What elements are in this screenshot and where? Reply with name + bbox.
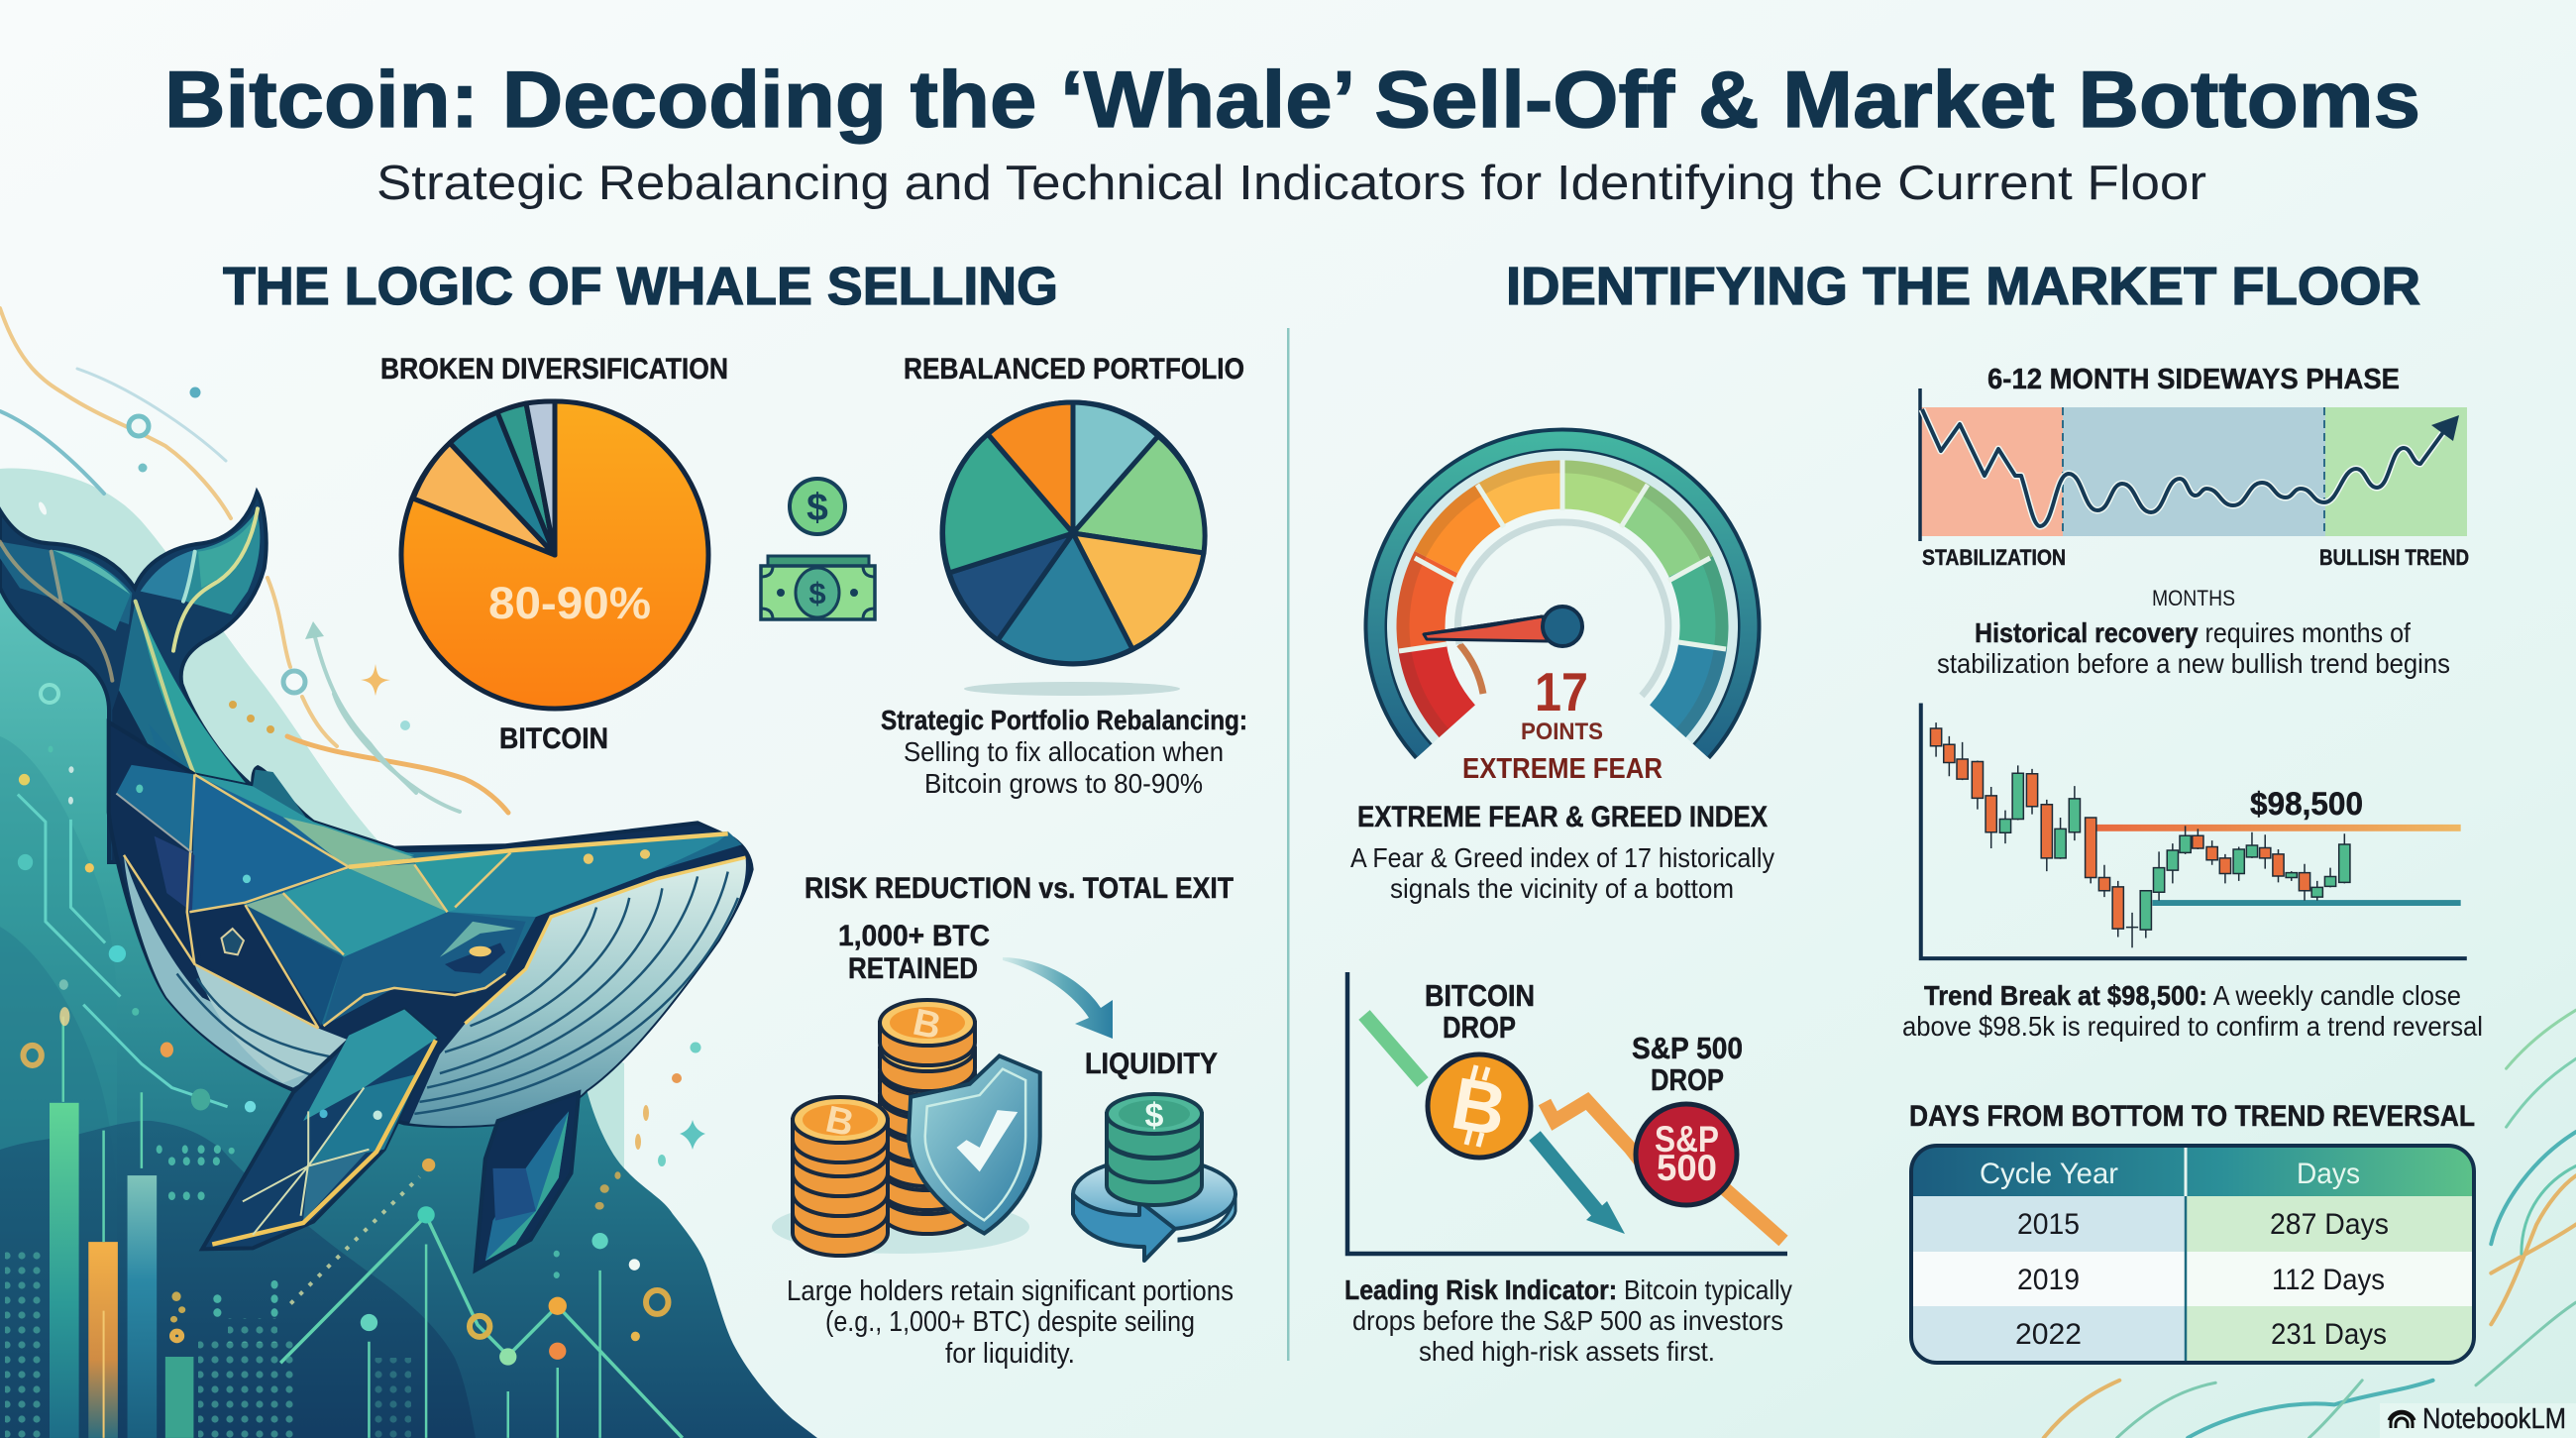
icon: liquidity stack with circular arrow bbox=[1073, 1094, 1235, 1261]
panel: leading risk indicator chart bbox=[1344, 972, 1792, 1367]
whale body bbox=[109, 722, 752, 1271]
icon: dollar coin bbox=[790, 479, 845, 534]
icon: banknote: $ bbox=[808, 576, 826, 610]
text: fear and greed: signals the vicinity of a bottom bbox=[1390, 873, 1734, 904]
text: strategic portfolio rebalancing bbox=[881, 705, 1247, 799]
row: 2022: 2022 bbox=[2015, 1318, 2082, 1351]
text: historical recovery bbox=[1937, 617, 2450, 679]
panel: sideways phase chart bbox=[1920, 364, 2469, 679]
icon: liquidity stack with circular arrow: $ bbox=[1145, 1097, 1164, 1135]
label: 1,000+ BTC retained: RETAINED bbox=[848, 952, 978, 985]
label: 1,000+ BTC retained: 1,000+ BTC bbox=[838, 920, 990, 952]
row: 2015: 2015 bbox=[2017, 1208, 2080, 1241]
logo: NotebookLM bbox=[2380, 1403, 2576, 1438]
heading: risk reduction: RISK REDUCTION vs. TOTAL EXIT bbox=[805, 872, 1234, 905]
label: rebalanced portfolio: REBALANCED PORTFOLIO bbox=[904, 353, 1244, 386]
decorative curves: top left bbox=[0, 308, 705, 1166]
labels: bitcoin drop: DROP bbox=[1443, 1010, 1516, 1045]
pie chart: 80-90% bitcoin bbox=[401, 401, 708, 709]
text: leading risk indicator bbox=[1344, 1274, 1792, 1367]
value: 17 points: POINTS bbox=[1521, 719, 1603, 745]
icon: dollar coin: $ bbox=[806, 487, 828, 529]
icon: bitcoin bbox=[1428, 1054, 1531, 1158]
label: $98,500: $98,500 bbox=[2250, 786, 2363, 822]
text: large holders: for liquidity. bbox=[945, 1338, 1075, 1370]
heading: left column: THE LOGIC OF WHALE SELLING bbox=[223, 257, 1058, 316]
text: leading risk indicator: Leading Risk Indicator: Bitcoin typically bbox=[1344, 1274, 1792, 1305]
gauge needle bbox=[1424, 607, 1582, 646]
panel: rebalanced portfolio pie bbox=[881, 353, 1247, 799]
heading: right column: IDENTIFYING THE MARKET FLOOR bbox=[1506, 257, 2420, 316]
table header bbox=[1980, 1158, 2360, 1190]
label: liquidity: LIQUIDITY bbox=[1085, 1048, 1218, 1080]
value: 17 points: 17 bbox=[1535, 661, 1588, 722]
text: fear and greed: A Fear & Greed index of 17 historically bbox=[1350, 842, 1774, 873]
icon: short bitcoin coin stack: B bbox=[822, 1099, 857, 1145]
labels: S&P 500 drop: S&P 500 bbox=[1632, 1031, 1743, 1065]
centre divider bbox=[1287, 328, 1290, 1361]
arrow: retained to liquidity bbox=[1003, 957, 1113, 1039]
line: green drop bbox=[1364, 1015, 1423, 1082]
table header: Days bbox=[2297, 1158, 2360, 1190]
price line bbox=[1922, 409, 2459, 526]
text: trend break bbox=[1902, 980, 2483, 1042]
chart axes bbox=[1347, 972, 1787, 1254]
heading: sideways phase: 6-12 MONTH SIDEWAYS PHASE bbox=[1987, 364, 2400, 395]
text: fear and greed bbox=[1350, 842, 1774, 904]
row: 2019 bbox=[2017, 1264, 2385, 1296]
heading: extreme fear and greed index: EXTREME FEAR & GREED INDEX bbox=[1357, 801, 1768, 833]
row: 2019: 112 Days bbox=[2272, 1264, 2385, 1296]
labels: bitcoin drop bbox=[1425, 978, 1535, 1045]
text: trend break: above $98.5k is required to confirm a trend reversal bbox=[1902, 1011, 2483, 1042]
whale eye bbox=[440, 922, 515, 974]
text: large holders bbox=[787, 1275, 1234, 1370]
label: 1,000+ BTC retained bbox=[838, 920, 990, 985]
pie chart: evenly split portfolio bbox=[942, 402, 1205, 664]
panel: candlestick chart bbox=[1902, 703, 2483, 1042]
value: 80-90%: 80-90% bbox=[488, 578, 651, 628]
labels: S&P 500 drop: DROP bbox=[1651, 1062, 1724, 1097]
row: 2019: 2019 bbox=[2017, 1264, 2080, 1296]
whale lower fin bbox=[476, 1092, 579, 1271]
labels: S&P 500 drop bbox=[1632, 1031, 1743, 1097]
value: 17 points bbox=[1521, 661, 1603, 745]
label: stabilization: STABILIZATION bbox=[1922, 545, 2066, 570]
icon: notebook arcs bbox=[2389, 1411, 2415, 1428]
label: months: MONTHS bbox=[2152, 586, 2235, 610]
line: orange S&P path bbox=[1545, 1101, 1783, 1241]
pie shadow bbox=[964, 682, 1180, 696]
text: historical recovery: Historical recovery requires months of bbox=[1975, 617, 2411, 648]
gauge dial bbox=[1376, 440, 1749, 751]
decorative wave illustration: left bbox=[0, 469, 817, 1438]
decorative curves: bottom right bbox=[2044, 1010, 2576, 1438]
text: large holders: Large holders retain significant portions bbox=[787, 1275, 1234, 1307]
panel: days from bottom table bbox=[1909, 1100, 2475, 1363]
panel: fear and greed gauge bbox=[1350, 440, 1774, 904]
icon: tall bitcoin coin stack: B bbox=[910, 1002, 944, 1048]
text: trend break: Trend Break at $98,500: A weekly candle close bbox=[1924, 980, 2461, 1011]
label: broken diversification: BROKEN DIVERSIFICATION bbox=[380, 353, 728, 386]
icon: S&P 500 bbox=[1636, 1104, 1737, 1205]
icon: S&P 500: S&P bbox=[1655, 1119, 1719, 1160]
labels: bitcoin drop: BITCOIN bbox=[1425, 978, 1535, 1013]
icon: S&P 500: 500 bbox=[1657, 1148, 1717, 1188]
whale tail bbox=[0, 493, 267, 862]
text: historical recovery: stabilization before a new bullish trend begins bbox=[1937, 648, 2450, 679]
title: Bitcoin: Decoding the ‘Whale’ Sell-Off & Market Bottoms bbox=[164, 55, 2420, 145]
y axis bbox=[1918, 388, 1922, 541]
row: 2022: 231 Days bbox=[2271, 1318, 2387, 1351]
dot grids bbox=[5, 1251, 411, 1438]
text: strategic portfolio rebalancing: Bitcoin grows to 80-90% bbox=[924, 768, 1203, 799]
panel: risk reduction vs total exit bbox=[772, 872, 1235, 1370]
label: bitcoin: BITCOIN bbox=[499, 722, 608, 755]
icon: tall bitcoin coin stack bbox=[880, 1000, 975, 1234]
row: 2015 bbox=[2017, 1208, 2389, 1241]
text: strategic portfolio rebalancing: Strategic Portfolio Rebalancing: bbox=[881, 705, 1247, 735]
icon: banknote bbox=[761, 556, 875, 619]
heading: days from bottom: DAYS FROM BOTTOM TO TREND REVERSAL bbox=[1909, 1100, 2475, 1133]
text: strategic portfolio rebalancing: Selling to fix allocation when bbox=[904, 736, 1224, 767]
panel: broken diversification pie bbox=[380, 353, 728, 755]
icon: short bitcoin coin stack bbox=[793, 1097, 888, 1256]
ground shadow bbox=[772, 1200, 1029, 1254]
label: bullish trend: BULLISH TREND bbox=[2319, 545, 2469, 570]
icon: money bbox=[761, 479, 875, 619]
chart decoration: bars, trend lines and nodes under the whale bbox=[18, 746, 683, 1438]
icon: bitcoin: B bbox=[1446, 1061, 1512, 1152]
text: large holders: (e.g., 1,000+ BTC) despite seiling bbox=[825, 1306, 1195, 1338]
text: leading risk indicator: shed high-risk assets first. bbox=[1419, 1336, 1715, 1367]
whale throat and grooves bbox=[124, 855, 746, 1126]
label: extreme fear: EXTREME FEAR bbox=[1462, 753, 1663, 785]
table header: Cycle Year bbox=[1980, 1158, 2118, 1190]
arrow: teal drop bbox=[1535, 1136, 1625, 1234]
table bbox=[1911, 1146, 2474, 1363]
phase bands bbox=[1920, 407, 2467, 536]
icon: whale bbox=[0, 493, 752, 1271]
icon: shield with check bbox=[909, 1055, 1040, 1234]
candlesticks and levels bbox=[1921, 703, 2467, 958]
subtitle: Strategic Rebalancing and Technical Indicators for Identifying the Current Floor bbox=[376, 157, 2206, 210]
row: 2022 bbox=[2015, 1318, 2387, 1351]
row: 2015: 287 Days bbox=[2270, 1208, 2389, 1241]
whale flipper bbox=[202, 1009, 438, 1249]
text: leading risk indicator: drops before the S&P 500 as investors bbox=[1352, 1305, 1783, 1336]
